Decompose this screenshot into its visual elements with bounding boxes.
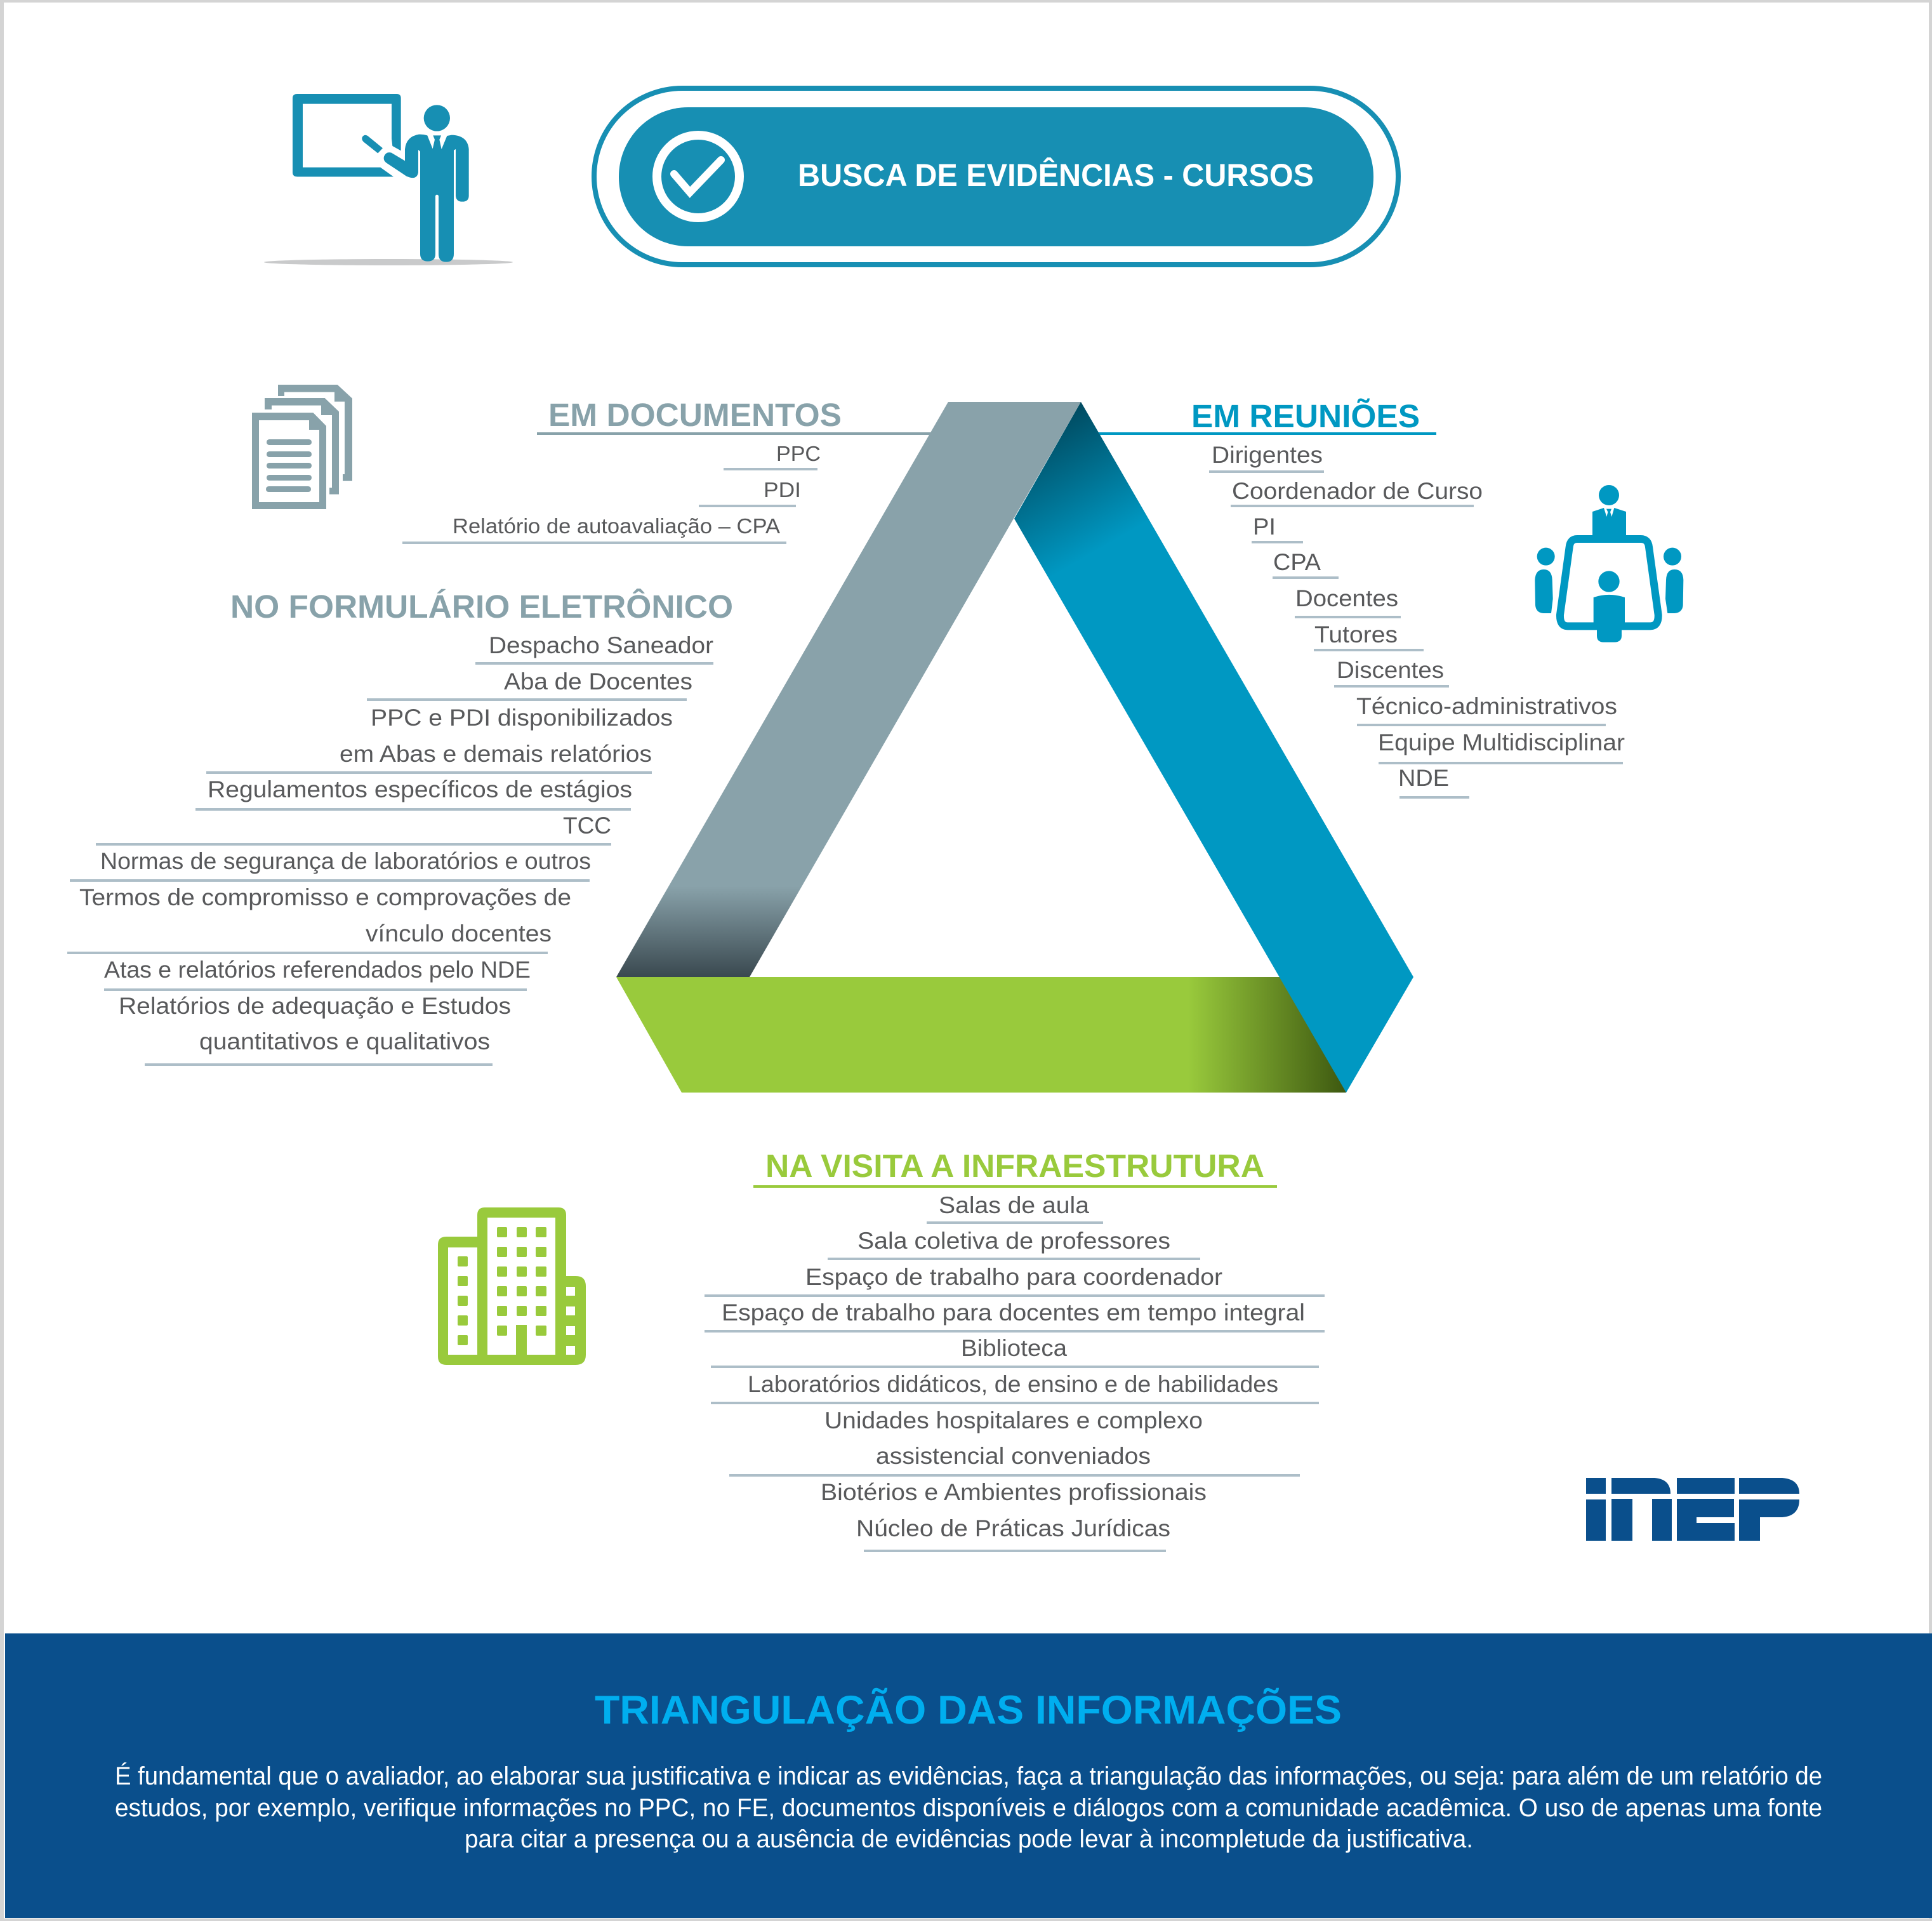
list: reuniões: NDE — [1398, 765, 1449, 791]
list: reuniões — [1209, 442, 1625, 799]
list: infraestrutura: Biotérios e Ambientes profissionais — [821, 1479, 1207, 1505]
list: infraestrutura: Unidades hospitalares e complexo — [824, 1407, 1203, 1433]
list: documentos: PPC — [776, 442, 821, 465]
list: formulário eletrônico: Regulamentos específicos de estágios — [208, 776, 632, 802]
list: reuniões: PI — [1253, 514, 1276, 540]
footer paragraph: É fundamental que o avaliador, ao elaborar sua justificativa e indicar as evidências, faça a triangulação das informações, ou seja: para além de um relatório de — [115, 1762, 1822, 1790]
footer heading: TRIANGULAÇÃO DAS INFORMAÇÕES — [595, 1687, 1342, 1732]
icon: documents — [252, 385, 352, 509]
heading: em documentos: EM DOCUMENTOS — [548, 397, 842, 433]
list: infraestrutura: Laboratórios didáticos, de ensino e de habilidades — [748, 1371, 1278, 1397]
list: reuniões: Tutores — [1314, 622, 1398, 648]
list: infraestrutura: Sala coletiva de professores — [857, 1228, 1170, 1254]
footer paragraph: estudos, por exemplo, verifique informações no PPC, no FE, documentos disponíveis e diálogos com a comunidade acadêmica. O uso de apenas uma fonte — [115, 1794, 1822, 1822]
logo: INEP — [1586, 1478, 1799, 1541]
list: formulário eletrônico: vínculo docentes — [366, 921, 552, 947]
list: formulário eletrônico: Aba de Docentes — [504, 668, 692, 695]
list: documentos — [402, 442, 821, 544]
list: reuniões: CPA — [1273, 549, 1321, 575]
list: formulário eletrônico: TCC — [563, 813, 611, 839]
band: blue — [1014, 402, 1413, 1093]
list: formulário eletrônico: Atas e relatórios referendados pelo NDE — [104, 957, 531, 983]
list: documentos: Relatório de autoavaliação – CPA — [453, 514, 780, 538]
title pill — [594, 88, 1398, 265]
list: formulário eletrônico: Despacho Saneador — [489, 632, 713, 658]
list: infraestrutura — [705, 1192, 1325, 1552]
list: reuniões: Equipe Multidisciplinar — [1378, 729, 1625, 755]
icon: buildings — [438, 1207, 586, 1365]
icon: meeting — [1535, 485, 1683, 642]
list: infraestrutura: Espaço de trabalho para docentes em tempo integral — [722, 1300, 1305, 1326]
footer panel — [5, 1633, 1932, 1918]
list: formulário eletrônico — [67, 632, 713, 1066]
title text: BUSCA DE EVIDÊNCIAS - CURSOS — [798, 157, 1314, 193]
list: reuniões: Dirigentes — [1212, 442, 1323, 468]
band: grey — [616, 402, 1081, 977]
list: infraestrutura: assistencial conveniados — [876, 1443, 1151, 1469]
heading: em reuniões: EM REUNIÕES — [1191, 397, 1420, 434]
band: green — [616, 977, 1346, 1093]
list: documentos: PDI — [764, 478, 801, 502]
list: reuniões: Técnico-administrativos — [1356, 693, 1617, 719]
list: infraestrutura: Núcleo de Práticas Jurídicas — [856, 1515, 1170, 1541]
list: reuniões: Coordenador de Curso — [1232, 478, 1483, 504]
list: formulário eletrônico: Relatórios de adequação e Estudos — [119, 993, 511, 1019]
triangle diagram — [616, 402, 1413, 1093]
heading: no formulário eletrônico: NO FORMULÁRIO ELETRÔNICO — [230, 588, 733, 625]
list: reuniões: Discentes — [1337, 657, 1444, 683]
list: formulário eletrônico: PPC e PDI disponibilizados — [371, 705, 673, 731]
list: infraestrutura: Espaço de trabalho para coordenador — [805, 1264, 1222, 1290]
list: formulário eletrônico: Termos de compromisso e comprovações de — [79, 884, 571, 910]
list: formulário eletrônico: Normas de segurança de laboratórios e outros — [100, 848, 591, 874]
list: reuniões: Docentes — [1295, 585, 1398, 611]
list: formulário eletrônico: em Abas e demais relatórios — [340, 741, 652, 767]
icon: check mark — [657, 135, 739, 218]
footer paragraph: para citar a presença ou a ausência de evidências pode levar à incompletude da justificativa. — [465, 1825, 1473, 1853]
list: infraestrutura: Salas de aula — [939, 1192, 1089, 1218]
heading: na visita a infraestrutura: NA VISITA A INFRAESTRUTURA — [765, 1148, 1264, 1184]
footer paragraph — [115, 1762, 1822, 1853]
list: formulário eletrônico: quantitativos e qualitativos — [199, 1028, 490, 1054]
icon: teacher at board — [264, 94, 513, 265]
list: infraestrutura: Biblioteca — [961, 1335, 1067, 1361]
